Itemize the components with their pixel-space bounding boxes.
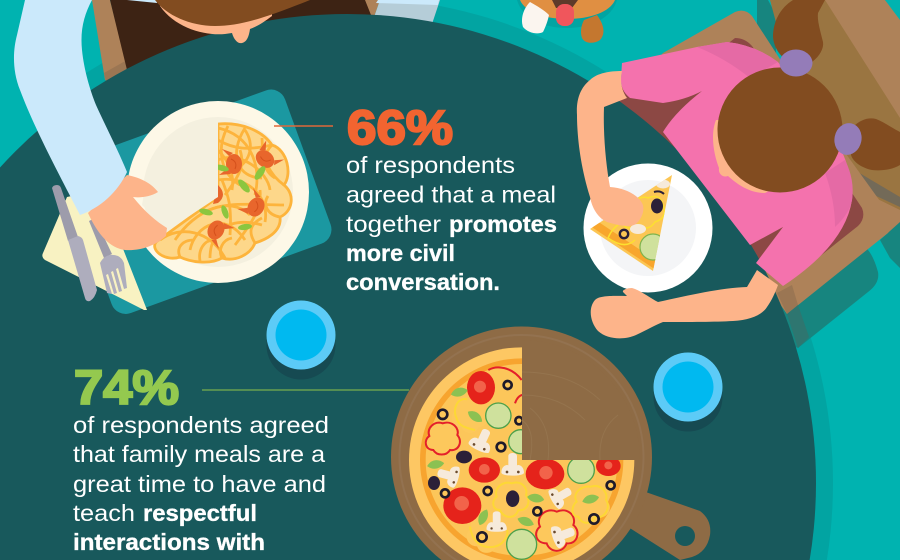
cucumbers	[486, 403, 511, 428]
fork	[89, 218, 127, 294]
stat body text: 74%: respectful	[143, 500, 257, 526]
shrimps	[219, 149, 242, 175]
stat body text: 66%: conversation.	[346, 269, 500, 295]
stat: 74%: 74%	[74, 362, 179, 415]
pizza board	[391, 326, 710, 560]
dog paw right	[581, 15, 603, 43]
stat body text: 66%: agreed that a meal	[346, 182, 556, 208]
stat body text: 74%: interactions with	[73, 529, 265, 555]
girl's chair seat	[610, 11, 892, 314]
tomatoes	[467, 371, 495, 404]
hair	[155, 0, 310, 26]
leaves	[450, 386, 469, 398]
stat body text: 66%: together	[346, 211, 441, 237]
girl's near arm and hand	[591, 270, 778, 338]
olive rings	[438, 381, 615, 542]
stat body text: 66%: more civil	[346, 240, 455, 266]
olives	[456, 451, 472, 463]
left diner hand	[88, 175, 167, 250]
callout leader: 74%	[202, 389, 409, 391]
stat body text: 74%: of respondents agreed	[73, 412, 329, 438]
mushrooms	[467, 425, 497, 455]
stat body text: 74%: that family meals are a	[73, 441, 325, 467]
dog tongue	[556, 4, 574, 26]
placemat	[108, 90, 332, 314]
hair ties	[780, 50, 865, 157]
napkin	[42, 190, 147, 310]
eaten pizza quarter	[522, 340, 640, 460]
dog paw left	[522, 2, 549, 33]
stat: 74%	[73, 362, 329, 555]
spaghetti	[155, 124, 291, 262]
stat body text: 66%: promotes	[449, 211, 557, 237]
knife	[52, 185, 97, 301]
stat: 66%	[346, 102, 557, 295]
girl's face	[713, 120, 768, 193]
basil leaves	[254, 166, 266, 180]
stat: 66%: 66%	[347, 102, 453, 155]
callout leader: 66%	[274, 125, 333, 127]
whole pizza	[409, 347, 634, 560]
stat body text: 74%	[73, 412, 329, 555]
girl's shirt	[621, 42, 853, 286]
girl's chair back	[757, 0, 900, 268]
eaten wedge	[142, 164, 218, 206]
girl's far arm and hand	[577, 71, 643, 226]
glass right	[654, 352, 722, 432]
stat body text: 66%	[346, 152, 557, 295]
chair edge seen through table	[777, 285, 809, 348]
pizza slice	[590, 175, 672, 271]
girl's chair shadow	[782, 250, 878, 348]
left diner sleeve	[14, 0, 127, 215]
stat body text: 74%: teach	[73, 500, 135, 526]
glass left	[266, 300, 336, 380]
stat body text: 66%: of respondents	[346, 152, 515, 178]
left diner head	[155, 0, 310, 43]
girl's plate	[581, 164, 712, 292]
chair: left diner	[92, 0, 380, 82]
left diner arm: far sleeve	[127, 0, 440, 24]
pasta plate	[127, 101, 309, 283]
girl's hair	[718, 68, 842, 192]
board hole	[675, 526, 695, 546]
seat cushion	[619, 38, 864, 259]
girl's pigtails	[773, 0, 900, 170]
peppers	[425, 422, 460, 456]
dog	[517, 0, 617, 43]
stat body text: 74%: great time to have and	[73, 471, 326, 497]
